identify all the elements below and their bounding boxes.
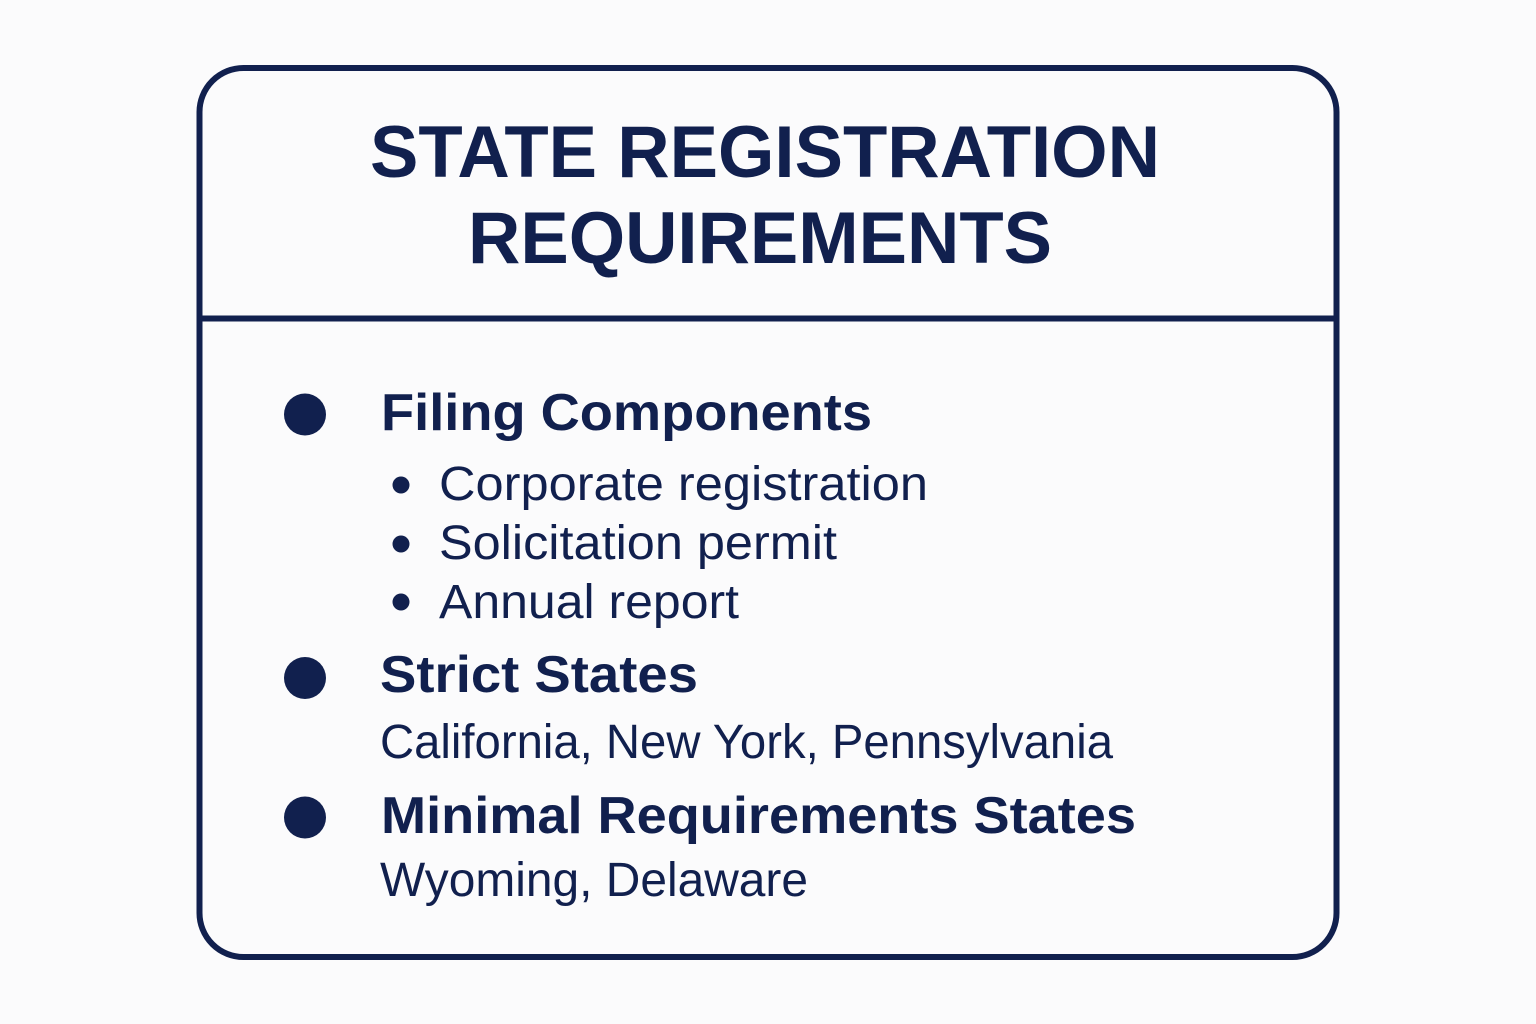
icon: filing components bullet [284, 394, 326, 436]
list item: corporate registration: Corporate registration [439, 458, 928, 511]
icon: strict states bullet [284, 657, 326, 699]
section: filing components [284, 384, 928, 629]
title: REQUIREMENTS [468, 198, 1052, 279]
text: strict states list: California, New York, Pennsylvania [380, 716, 1113, 769]
heading: minimal requirements states: Minimal Requirements States [381, 787, 1136, 845]
list item: solicitation permit: Solicitation permit [439, 517, 837, 570]
heading: strict states: Strict States [380, 646, 698, 704]
icon: minimal requirements bullet [284, 796, 326, 838]
section: strict states [284, 646, 1113, 769]
title [370, 112, 1160, 279]
list item: annual report: Annual report [439, 576, 739, 629]
title: STATE REGISTRATION [370, 112, 1160, 193]
panel: state registration card [200, 68, 1336, 957]
section: minimal requirements states [284, 787, 1136, 907]
text: minimal requirements states list: Wyoming, Delaware [380, 854, 808, 907]
heading: filing components: Filing Components [381, 384, 872, 442]
